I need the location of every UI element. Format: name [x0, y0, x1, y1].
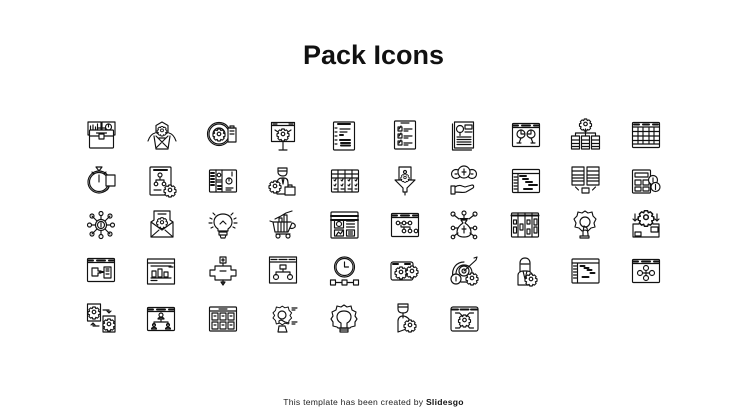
icon: target with gears and coin: [451, 257, 478, 285]
icon: presentation board gear: [272, 122, 294, 150]
icon: task list: [394, 121, 416, 149]
icon: gear over server box: [633, 211, 659, 237]
icon: gear with hand and bulb: [273, 306, 297, 332]
icon: document with flowchart and gear: [150, 167, 176, 197]
icon: kanban table: [332, 170, 358, 192]
icon: dashboard window: [331, 212, 358, 238]
icon: calculator with coins: [632, 170, 660, 193]
icon: envelope with gear: [151, 211, 173, 237]
icon: dashboard panels: [210, 170, 236, 192]
icon: window with gears: [391, 262, 418, 280]
icon: shopping cart with chart: [270, 211, 295, 238]
icon: target with clipboard: [208, 122, 236, 146]
icon: person with gear: [398, 304, 416, 332]
icon: briefcase with charts: [88, 122, 115, 148]
icon: flow diagram: [210, 257, 236, 285]
icon: window with grid: [210, 307, 236, 331]
icon: stopwatch: [88, 167, 115, 193]
icon: funnel with document: [395, 167, 415, 195]
icon: light bulb in gear: [331, 305, 357, 332]
icon: window with bar chart: [148, 259, 174, 284]
icon: person with gear: [518, 258, 537, 286]
icon: person with gear and case: [269, 168, 295, 195]
icon: org chart with gear: [572, 119, 600, 149]
icon: gear with people: [148, 122, 176, 149]
icon: hand holding gear: [574, 211, 596, 238]
icon: two documents exchange: [88, 304, 115, 332]
icon: idea light bulb: [209, 213, 237, 238]
icon: window with linked blocks: [88, 258, 114, 282]
icon: window with node flow: [392, 214, 418, 236]
icon: checklist document: [334, 122, 354, 150]
icon: window with central gear: [451, 307, 478, 331]
icon: two tables linked: [572, 167, 599, 193]
icon: kanban board: [512, 213, 538, 237]
icon: clock with timeline: [330, 257, 358, 285]
title: Pack Icons: [303, 40, 444, 70]
icon: network hub with coin: [88, 212, 114, 238]
icon: document with pie chart: [452, 122, 474, 150]
footer credit: This template has been created by Slidesgo: [283, 397, 464, 407]
icon: window with org tree: [270, 257, 296, 283]
icon: hand holding coins: [451, 166, 476, 194]
icon: window with two pins: [512, 124, 540, 146]
icon: window with circle diagram: [632, 260, 660, 282]
icon: calendar table: [632, 122, 660, 148]
icon: window with gantt chart: [512, 170, 540, 192]
icon: window with step chart: [572, 259, 599, 283]
icon: window with person tree: [148, 308, 174, 330]
icon: money bag network: [451, 211, 477, 239]
